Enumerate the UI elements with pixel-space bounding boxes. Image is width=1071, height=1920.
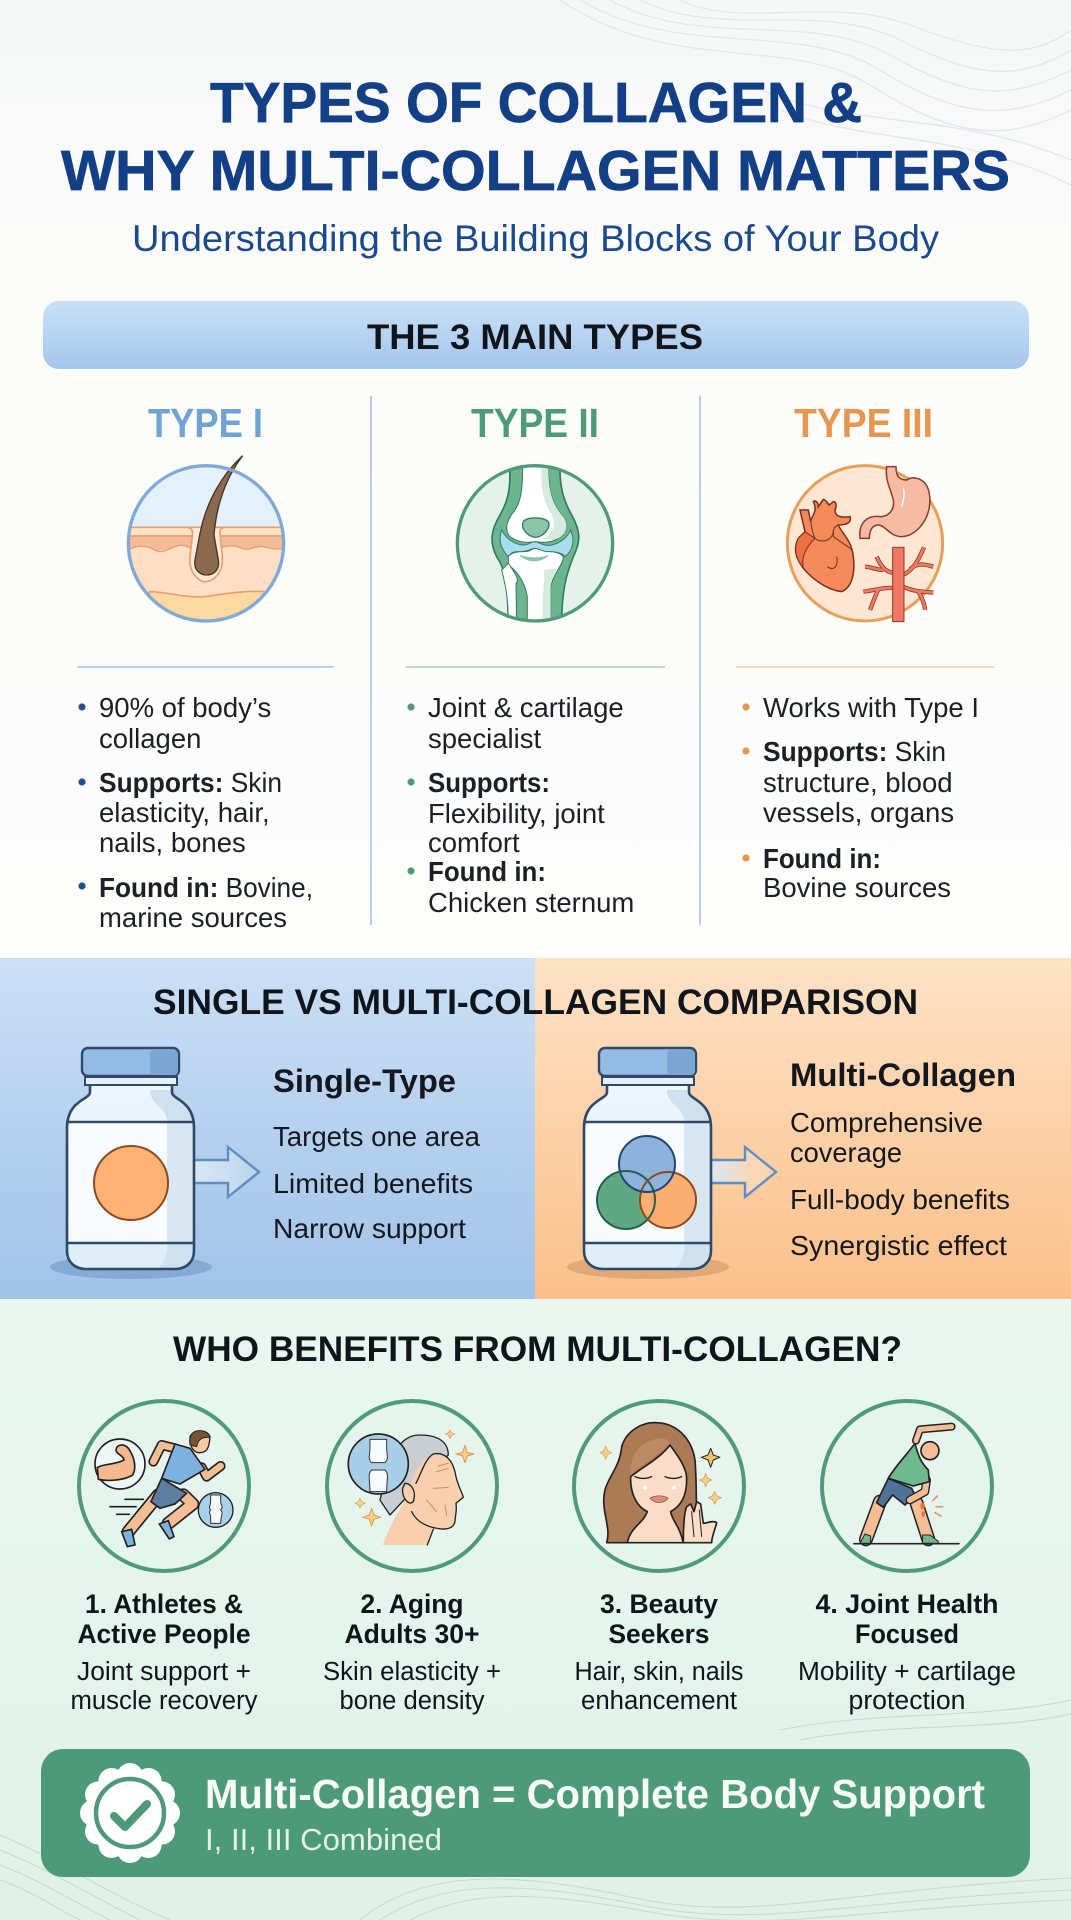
icon: beauty seeker [574, 1401, 744, 1571]
text: single-type: Narrow support [273, 1213, 466, 1244]
text: multi-collagen: Multi-Collagen [790, 1057, 1016, 1093]
bullet list: type I: 90% of body’s [99, 692, 271, 723]
rule [77, 666, 334, 668]
icon: athlete [79, 1401, 249, 1571]
label: beauty seekers: Hair, skin, nails [574, 1658, 744, 1686]
icon: check badge [80, 1763, 180, 1863]
label: joint health: protection [848, 1687, 966, 1715]
section banner: the 3 main types [43, 301, 1029, 369]
heading: type III: TYPE III [794, 400, 933, 446]
text: multi-collagen: Synergistic effect [790, 1230, 1007, 1261]
label: athletes [70, 1589, 258, 1715]
panel: type I [77, 400, 334, 933]
label: athletes: 1. Athletes & [85, 1589, 243, 1619]
label: joint health: 4. Joint Health [816, 1589, 998, 1619]
label: aging adults: 2. Aging [360, 1589, 464, 1619]
callout: complete body support [41, 1749, 1030, 1877]
title [61, 71, 1010, 203]
label: aging adults: bone density [340, 1687, 485, 1715]
label: joint health [798, 1589, 1016, 1715]
heading: who benefits: WHO BENEFITS FROM MULTI-COLLAGEN? [173, 1330, 902, 1369]
heading: type II: TYPE II [471, 400, 599, 446]
label: beauty seekers [574, 1589, 744, 1715]
title: TYPES OF COLLAGEN & [210, 71, 862, 135]
bullet list: type II: Joint & cartilage [428, 692, 624, 723]
heading: type I: TYPE I [148, 400, 263, 446]
bullet list: type II: comfort [428, 827, 520, 858]
text: multi-collagen: coverage [790, 1137, 902, 1168]
bullet list: type I: nails, bones [99, 827, 246, 858]
label: joint health: Mobility + cartilage [798, 1658, 1016, 1686]
label: joint health: Focused [855, 1619, 959, 1649]
text: multi-collagen: Full-body benefits [790, 1184, 1010, 1215]
text: multi-collagen [790, 1057, 1016, 1261]
callout: complete body support: I, II, III Combined [205, 1822, 442, 1857]
label: aging adults: Adults 30+ [344, 1619, 480, 1649]
bullet list: type III: Works with Type I [763, 692, 979, 723]
bullet list: type III: Found in: [763, 843, 881, 874]
label: aging adults [323, 1589, 501, 1715]
label: athletes: Active People [78, 1619, 250, 1649]
title: WHY MULTI-COLLAGEN MATTERS [61, 139, 1010, 203]
icon: aging adult [327, 1401, 497, 1571]
bullet list: type III [742, 692, 979, 903]
bullet list: type III: structure, blood [763, 767, 953, 798]
text: single-type: Targets one area [273, 1121, 480, 1152]
bullet list: type II: Flexibility, joint [428, 798, 605, 829]
text: single-type: Single-Type [273, 1063, 456, 1099]
page background [0, 0, 1071, 958]
bullet list: type II: specialist [428, 723, 541, 754]
label: aging adults: Skin elasticity + [323, 1658, 501, 1686]
text: single-type: Limited benefits [273, 1168, 473, 1199]
panel: single vs multi comparison [0, 958, 1071, 1299]
section banner: the 3 main types: THE 3 MAIN TYPES [367, 318, 703, 357]
bullet list: type I: collagen [99, 723, 201, 754]
icon: single-type bottle [50, 1048, 259, 1279]
bullet list: type I: marine sources [99, 902, 287, 933]
bullet list: type II: Supports: [428, 767, 550, 798]
icon: heart, stomach, vessels [787, 466, 943, 622]
subtitle: Understanding the Building Blocks of Your Body [132, 218, 940, 259]
bullet list: type I [78, 692, 313, 933]
panel: type II [406, 400, 665, 918]
bullet list: type III: Supports: Skin [763, 736, 946, 767]
text: multi-collagen: Comprehensive [790, 1107, 983, 1138]
column dividers [371, 396, 700, 925]
bullet list: type II [407, 692, 634, 918]
bullet list: type I: Supports: Skin [99, 767, 282, 798]
heading: comparison: SINGLE VS MULTI-COLLAGEN COMPARISON [153, 983, 918, 1022]
bullet list: type III: Bovine sources [763, 872, 951, 903]
callout text: Multi-Collagen = Complete Body Support [205, 1771, 985, 1817]
bullet list: type III: vessels, organs [763, 797, 954, 828]
bullet list: type I: Found in: Bovine, [99, 872, 313, 903]
label: beauty seekers: Seekers [608, 1619, 710, 1649]
bullet list: type I: elasticity, hair, [99, 797, 270, 828]
label: beauty seekers: enhancement [581, 1687, 737, 1715]
bullet list: type II: Chicken sternum [428, 887, 634, 918]
rule [736, 666, 994, 668]
label: athletes: Joint support + [77, 1658, 251, 1686]
icon: multi-collagen bottle [567, 1048, 776, 1279]
panel: who benefits [0, 1299, 1071, 1920]
bullet list: type II: Found in: [428, 856, 546, 887]
icon: joint health stretch [822, 1401, 992, 1571]
label: athletes: muscle recovery [70, 1687, 258, 1715]
panel: type III [736, 400, 994, 903]
icon: knee joint [457, 463, 613, 623]
text: single-type [273, 1063, 480, 1244]
label: beauty seekers: 3. Beauty [600, 1589, 718, 1619]
icon: skin and hair [123, 456, 290, 627]
rule [406, 666, 665, 668]
